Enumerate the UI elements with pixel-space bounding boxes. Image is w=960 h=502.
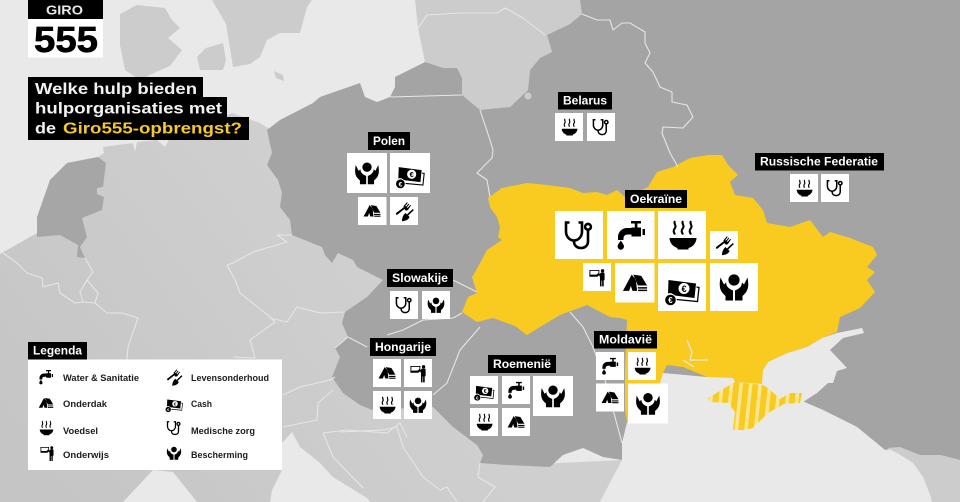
panel: legend	[28, 342, 282, 470]
map: continental western and central Europe	[0, 113, 622, 502]
panel: Polen	[347, 132, 430, 225]
panel: legend: Voedsel	[63, 426, 98, 437]
panel: legend: Onderwijs	[63, 450, 109, 461]
panel: Roemenië: Roemenië	[493, 359, 551, 371]
title: de	[35, 120, 56, 138]
panel: Moldavië	[594, 331, 668, 424]
map: Sweden	[212, 0, 312, 67]
panel: Hongarije	[370, 338, 436, 419]
panel: legend: Water & Sanitatie	[63, 373, 139, 384]
panel: legend: Medische zorg	[191, 426, 255, 437]
panel: Russische Federatie: Russische Federatie	[760, 156, 878, 168]
logo: Giro 555	[28, 0, 103, 60]
map: Denmark	[120, 5, 182, 80]
title: Giro555-opbrengst?	[63, 120, 242, 138]
map: country borders	[3, 8, 693, 502]
map: Kaliningrad, Poland, Hungary, Slovakia, Romania, Moldova and east	[267, 0, 960, 467]
map: Georgia	[887, 447, 960, 502]
map: Baltic island	[274, 71, 284, 81]
panel: Moldavië: Moldavië	[599, 334, 652, 346]
panel: Belarus	[555, 92, 615, 141]
panel: Russische Federatie	[755, 153, 884, 202]
panel: Roemenië	[470, 355, 573, 436]
logo: Giro 555: 555	[34, 19, 98, 60]
map: Netherlands	[37, 157, 106, 258]
logo: Giro 555: GIRO	[46, 4, 83, 18]
map: Black Sea and Azov	[600, 328, 932, 502]
panel: legend: Levensonderhoud	[191, 373, 269, 384]
title	[28, 77, 249, 140]
panel: Slowakije	[387, 269, 453, 319]
panel: legend: Bescherming	[191, 450, 248, 461]
panel: legend: Legenda	[33, 346, 83, 358]
map: Crimea	[708, 382, 802, 430]
panel: legend: Cash	[191, 399, 212, 410]
map: small lake	[524, 92, 532, 100]
title: Welke hulp bieden	[35, 81, 197, 98]
map: Danish islands	[197, 43, 226, 70]
title: hulporganisaties met	[35, 100, 223, 118]
map: Ukraine	[462, 155, 877, 423]
panel: Belarus: Belarus	[563, 96, 607, 108]
panel: Oekraïne	[555, 190, 758, 311]
map: Dnipro estuary	[683, 340, 708, 367]
panel: Polen: Polen	[373, 136, 405, 148]
panel: Slowakije: Slowakije	[392, 273, 448, 285]
map: Baltic states	[415, 0, 582, 112]
panel: Hongarije: Hongarije	[375, 342, 431, 354]
panel: legend: Onderdak	[63, 399, 108, 410]
panel: Oekraïne: Oekraïne	[630, 194, 682, 206]
